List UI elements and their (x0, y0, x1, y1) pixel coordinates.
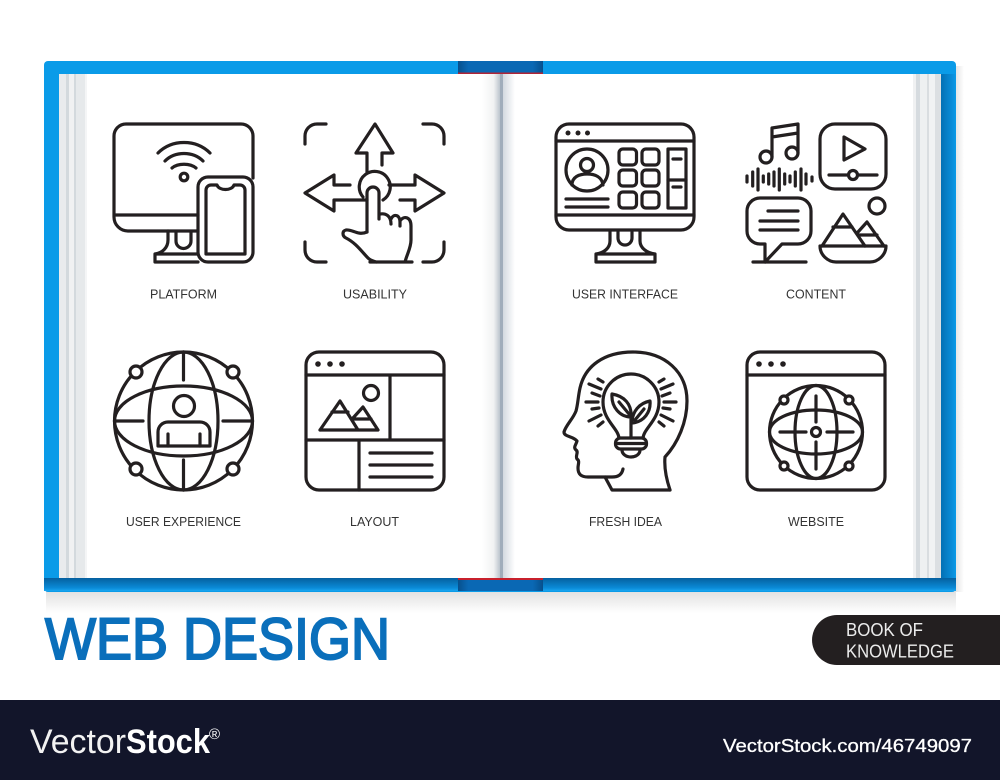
footer bar: Vector (30, 723, 126, 761)
icon: user interface (556, 124, 694, 262)
footer bar: VectorStock.com/46749097 (723, 735, 972, 756)
label: website: WEBSITE (788, 515, 844, 529)
label: usability: USABILITY (343, 288, 408, 302)
badge: book of knowledge: BOOK OF (846, 620, 923, 640)
icon: platform (114, 124, 253, 262)
footer bar: Stock (126, 723, 210, 761)
label: user experience: USER EXPERIENCE (126, 515, 241, 529)
badge: book of knowledge (812, 615, 1000, 665)
title: WEB DESIGN (45, 607, 390, 672)
footer bar: ® (209, 726, 220, 743)
icon: fresh idea (564, 352, 687, 490)
icon: content (747, 124, 886, 262)
book shadow (46, 66, 964, 613)
badge: book of knowledge: KNOWLEDGE (846, 642, 954, 662)
label: fresh idea: FRESH IDEA (589, 515, 663, 529)
icon: layout (306, 352, 444, 490)
icon: usability (305, 124, 444, 262)
footer bar (0, 700, 1000, 780)
label: user interface: USER INTERFACE (572, 288, 678, 302)
icon: user experience (114, 352, 252, 490)
label: content: CONTENT (786, 288, 846, 302)
book pages (59, 74, 941, 578)
label: layout: LAYOUT (350, 515, 399, 529)
label: platform: PLATFORM (150, 288, 217, 302)
book cover (44, 61, 956, 592)
icon: website (747, 352, 885, 490)
